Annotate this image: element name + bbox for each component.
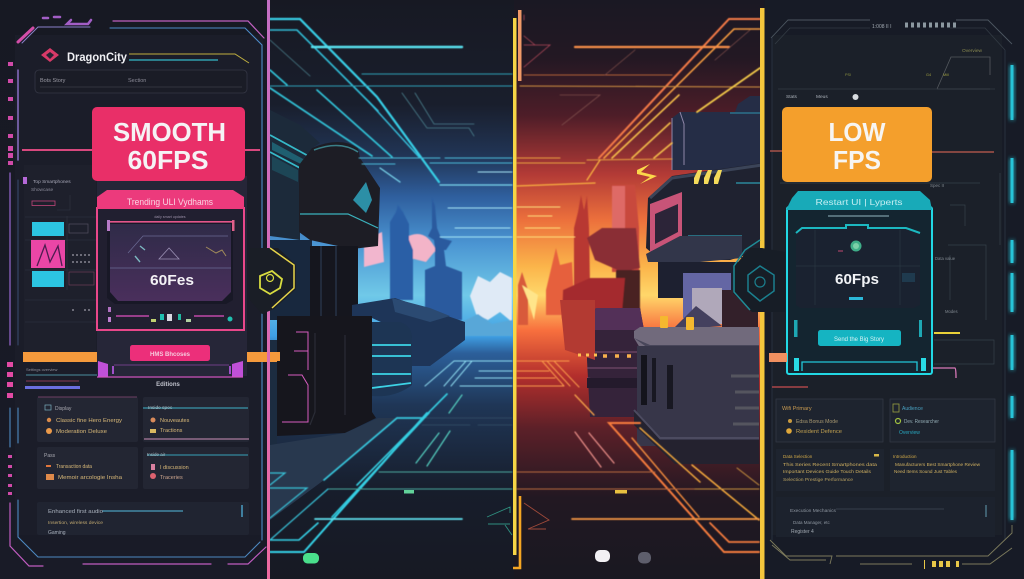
- info card top right: Dev. Researcher: [904, 419, 939, 425]
- card header: [786, 191, 932, 210]
- left tower building: [270, 110, 465, 460]
- right background wireframes: [780, 173, 1000, 364]
- divider: pink rule: [22, 149, 260, 151]
- right background wireframes: Modes: [945, 309, 958, 314]
- info card mid left: Transaction data: [56, 464, 93, 470]
- top status glyphs: Mill: [943, 73, 949, 77]
- scene: cyan city side: [270, 0, 514, 579]
- card CTA button: [130, 345, 210, 361]
- panel: left smooth 60fps UI: [0, 0, 277, 579]
- info card mid left: Memoir arcologie Insha: [58, 475, 123, 481]
- right nav row: [778, 89, 995, 100]
- chip: gray pill: [638, 552, 651, 564]
- card bottom brackets: [97, 361, 243, 377]
- card header title: Restart UI | Lyperts: [816, 197, 902, 207]
- machine building: [646, 96, 762, 330]
- orange tag and side bars: [769, 353, 808, 387]
- skyline: red towers: [518, 185, 640, 340]
- right nav row: Stats: [786, 94, 798, 100]
- icon: yellow hexagon connector: [249, 248, 296, 314]
- info card mid right: Inside air: [147, 452, 166, 457]
- icon: teal hexagon connector: [733, 240, 785, 312]
- card CTA button: HMS Bhcoses: [150, 352, 191, 358]
- info card mid left: [37, 447, 138, 489]
- info card mid left: This Series Recent Smartphones data: [783, 462, 878, 467]
- right nav row: Meus: [816, 94, 828, 100]
- info card mid right: [890, 449, 995, 491]
- top status glyphs: 1:008 II I: [872, 24, 891, 30]
- top status glyphs: PSI: [845, 73, 851, 77]
- info card mid right: I discussion: [160, 465, 189, 471]
- cyan overhead neon lines: [270, 19, 512, 237]
- left panel frame lines: [10, 17, 266, 566]
- center neon divider: [487, 10, 549, 568]
- info card top right: [890, 399, 995, 442]
- info card top right: [143, 397, 249, 442]
- icon: yellow lightning mark: [637, 164, 657, 184]
- badge: SMOOTH 60FPS: [92, 107, 245, 181]
- cyan floor neon lines: [270, 361, 512, 552]
- info card top left: [37, 397, 138, 442]
- info card mid right: Manufacturers Best Smartphone Review: [895, 462, 981, 467]
- purple pillar machine: [560, 300, 644, 417]
- info card top left: Edsa Bonus Mode: [796, 419, 838, 425]
- info card footer: Gaming: [48, 530, 66, 536]
- right frame lines: [770, 20, 1012, 564]
- orange floor neon lines: [517, 361, 759, 552]
- info card top left: [776, 399, 883, 442]
- counter block: [634, 316, 759, 464]
- card bottom brackets: [794, 358, 926, 371]
- divider: pink vertical line: [267, 0, 270, 579]
- 60Fes value: 60Fes: [150, 272, 194, 289]
- info card top left: Resident Defence: [796, 429, 842, 435]
- logo: Dragon City: [41, 48, 249, 64]
- panel: right low fps UI: [765, 0, 1024, 579]
- info card mid right: Need Items Sound Just Tables: [894, 469, 958, 474]
- right background wireframes: Spec II: [930, 183, 944, 188]
- sidebar: thumbnail column: [23, 165, 96, 355]
- logo: Dragon City: DragonCity: [67, 52, 128, 64]
- info card footer: [37, 502, 249, 536]
- info card mid left: Selection Prestige Performance: [783, 477, 854, 482]
- info card mid right: [143, 447, 249, 489]
- chip: small green dash: [404, 490, 414, 494]
- left floor slab: [270, 418, 397, 520]
- card CTA button: Send the Big Story: [834, 337, 884, 343]
- top status glyphs: Overview: [962, 48, 983, 54]
- info card top right: Nouveautes: [160, 418, 190, 424]
- info card top left: Display: [55, 406, 72, 412]
- card screen: [796, 225, 920, 308]
- sidebar: thumbnail column: Top Smartphones: [33, 179, 71, 185]
- top status glyphs: [845, 24, 983, 77]
- chip: white pill: [595, 550, 610, 562]
- top status glyphs: G4: [926, 73, 931, 77]
- right background wireframes: Data value: [935, 256, 956, 261]
- small progress lines: [25, 367, 98, 389]
- info card top right: Inside spec: [148, 405, 173, 411]
- info card footer: Insertion, wireless device: [48, 520, 103, 526]
- left side indicator squares: [7, 62, 13, 495]
- nav bar: Section: [128, 78, 146, 84]
- card CTA button: [818, 330, 901, 346]
- info card footer: Register 4: [791, 529, 814, 535]
- card: trending UI frame: daily smart updates: [154, 215, 186, 219]
- card header title: Trending ULI Vydhams: [127, 197, 213, 207]
- sidebar: thumbnail column: Showcase: [31, 187, 53, 193]
- pink accent line: [932, 368, 956, 378]
- info card top right: Tractions: [160, 428, 183, 434]
- info card footer: Data Manager, etc: [793, 520, 831, 525]
- scene: orange city side: [514, 0, 764, 579]
- badge: LOW FPS: FPS: [833, 145, 881, 175]
- info card mid right: Traceries: [160, 475, 183, 481]
- small progress lines: Settings overview: [26, 367, 57, 372]
- cyan side dashes: [1009, 65, 1015, 520]
- info card top left: Moderation Deluxe: [56, 429, 107, 435]
- info card top left: Wifi Primary: [782, 406, 812, 412]
- chip: yellow dash: [615, 490, 627, 494]
- card: trending UI frame: [97, 176, 247, 377]
- badge: SMOOTH 60FPS: SMOOTH: [113, 119, 226, 147]
- section heading: Editions: [156, 382, 180, 388]
- card: cyan frame: [786, 191, 932, 374]
- 60Fps value: 60Fps: [835, 271, 879, 288]
- card header: [97, 190, 244, 209]
- card screen: [107, 220, 234, 304]
- orange status bar: [23, 352, 277, 362]
- info card footer: Execution Mechanics: [790, 508, 837, 513]
- info card mid left: Data Selection: [783, 454, 813, 459]
- nav bar: Bots Story: [40, 78, 66, 84]
- nav bar: [35, 70, 247, 93]
- badge: SMOOTH 60FPS: 60FPS: [128, 147, 208, 175]
- info card top left: Classic fine Hero Energy: [56, 418, 122, 424]
- bottom indicators: [924, 560, 959, 569]
- badge: LOW FPS: [782, 107, 932, 182]
- card side ticks: [794, 320, 922, 337]
- info card top right: Audience: [902, 406, 923, 412]
- chip: green pill: [303, 553, 319, 564]
- badge: LOW FPS: LOW: [828, 117, 886, 147]
- orange overhead neon lines: [517, 15, 760, 237]
- info card mid left: [776, 449, 884, 491]
- info card mid left: Important Devices Guide Touch Details: [783, 469, 872, 474]
- divider: red rule: [770, 151, 994, 152]
- info card footer: [776, 497, 995, 537]
- divider: yellow vertical line: [760, 8, 764, 579]
- info card footer: Enhanced first audio: [48, 509, 103, 515]
- yellow accent bar: [934, 332, 960, 334]
- info card top right: Overview: [899, 430, 920, 436]
- info card mid left: Pass: [44, 453, 56, 459]
- card controls: [108, 307, 232, 322]
- info card mid right: Introduction: [893, 454, 917, 459]
- skyline: blue towers: [364, 198, 512, 336]
